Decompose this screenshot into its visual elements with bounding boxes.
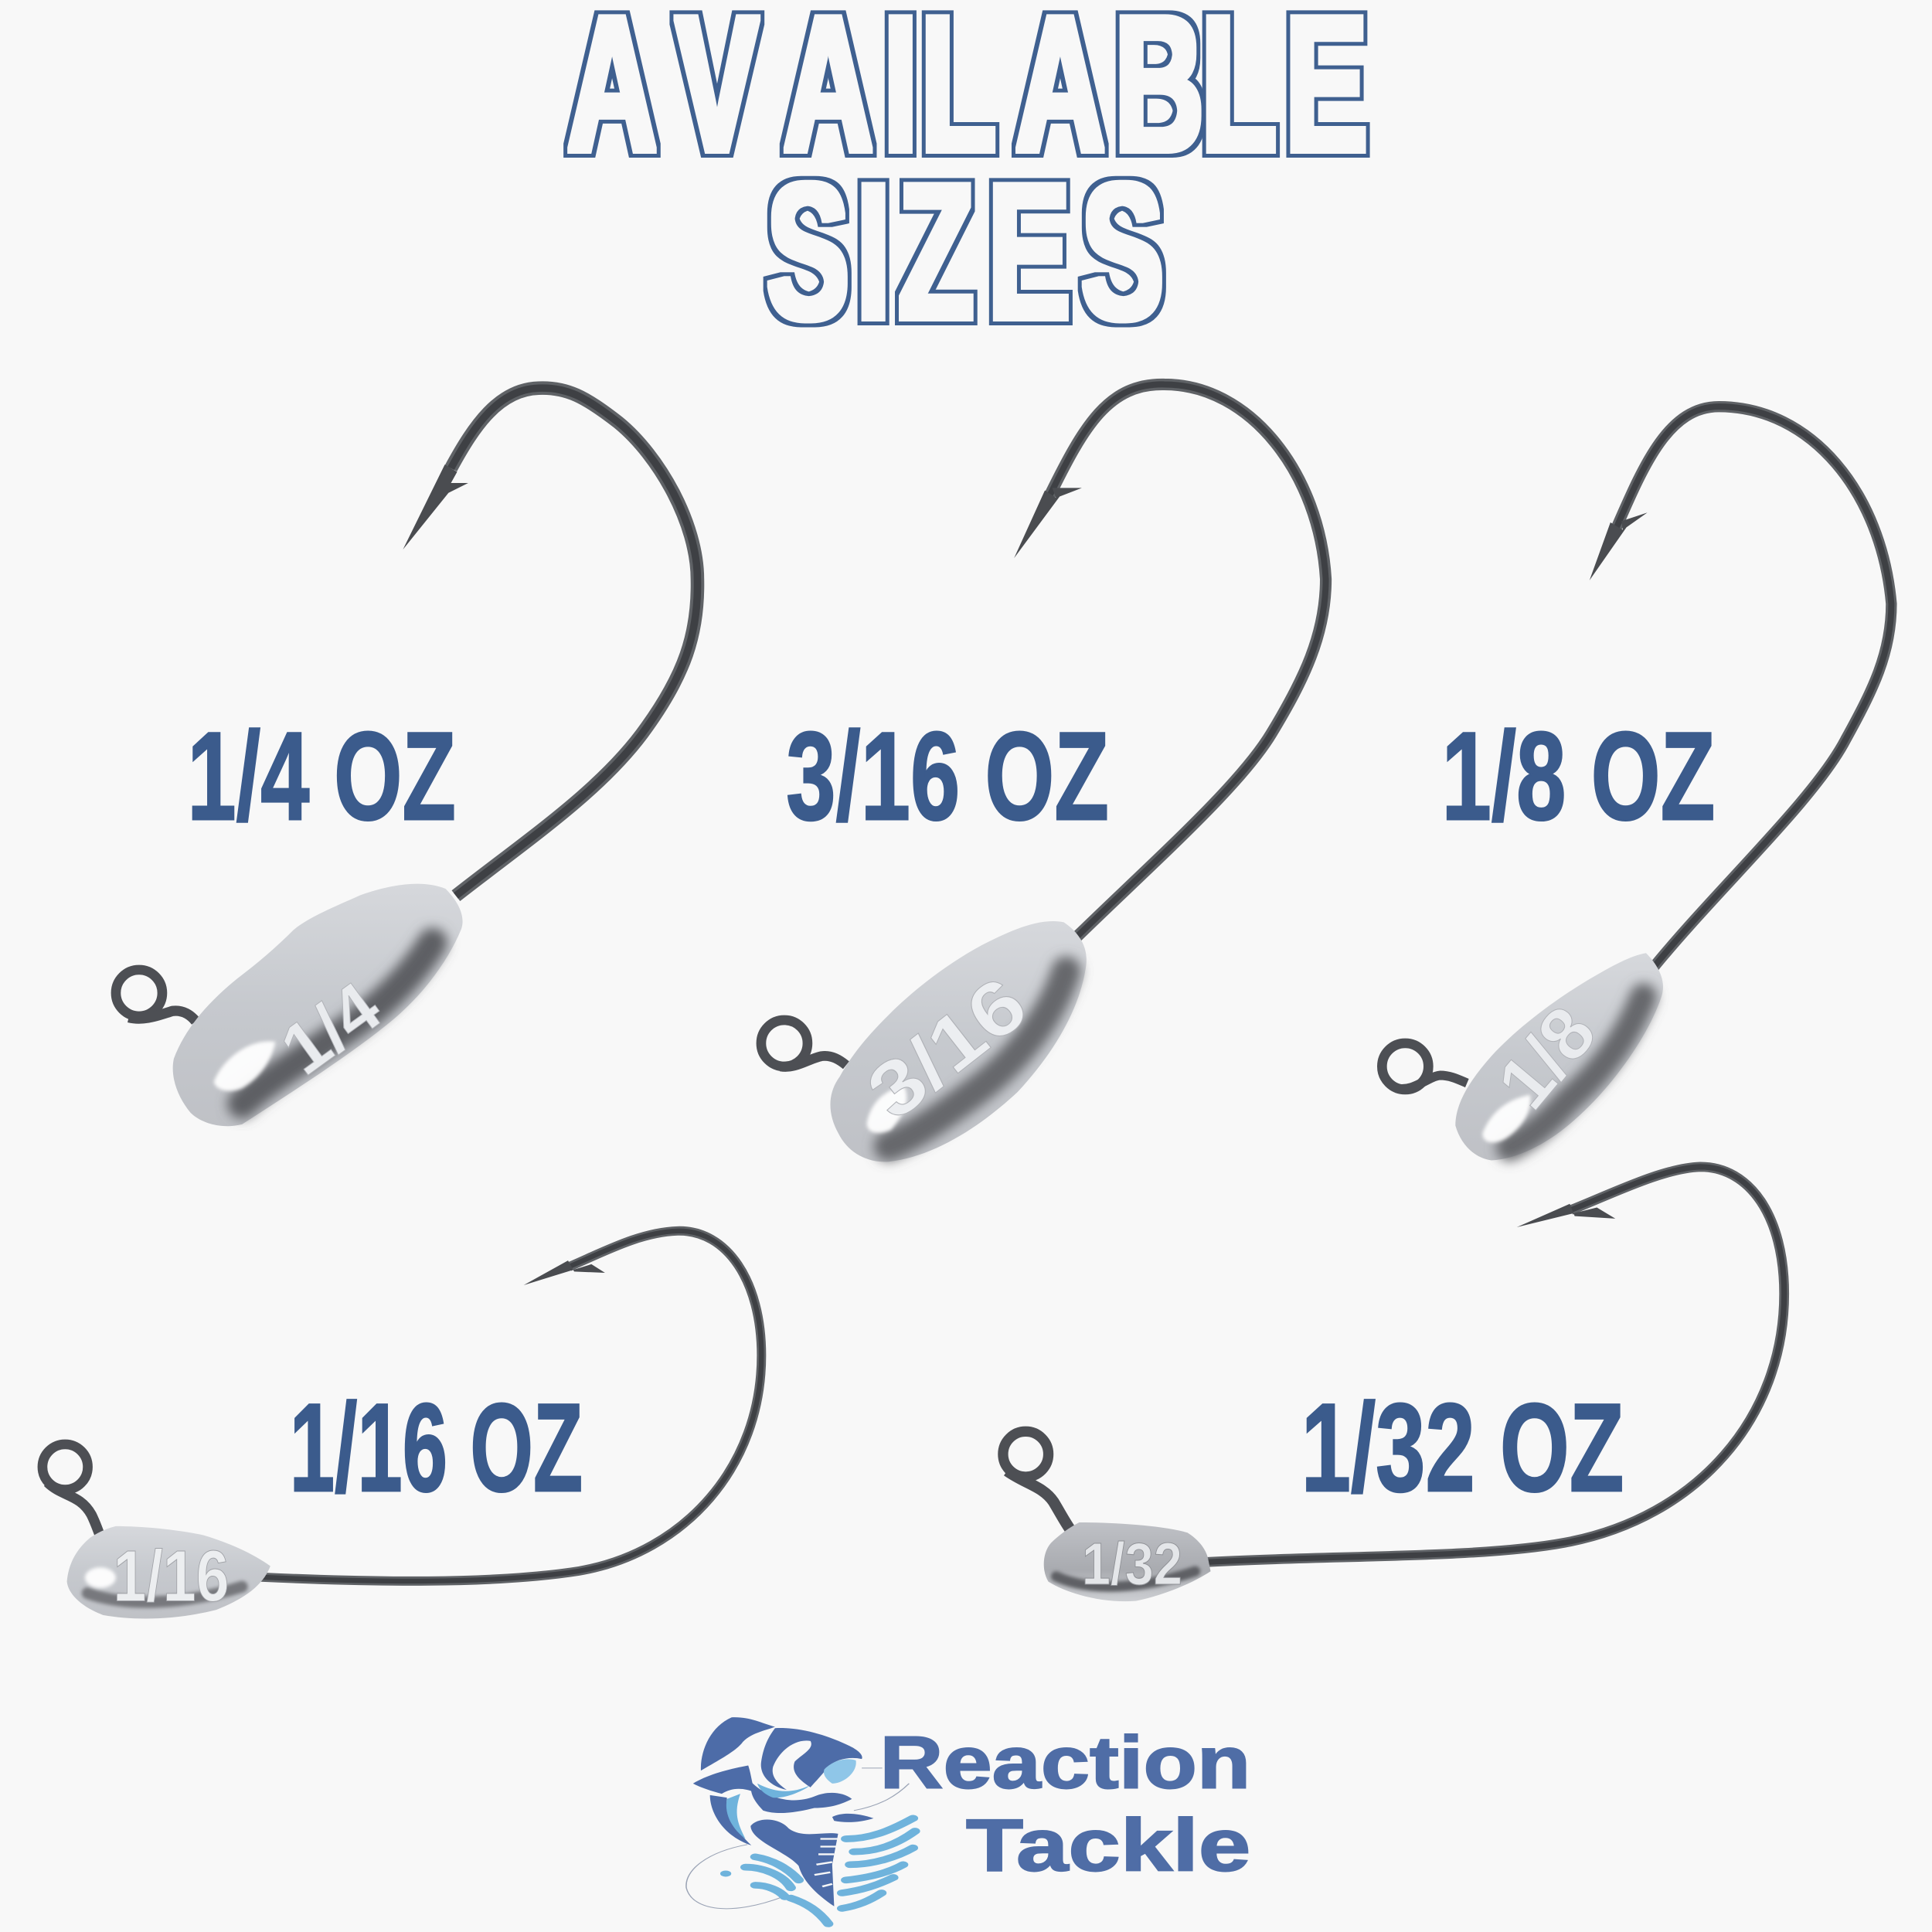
hook wire <box>1202 1167 1784 1563</box>
jig hook: 3/16 oz <box>761 384 1326 1162</box>
side dark <box>710 1795 751 1845</box>
logo: Reaction Tackle <box>686 1717 1250 1923</box>
lead body <box>1455 953 1663 1161</box>
dark band <box>889 971 1066 1146</box>
eye and lead head <box>761 921 1087 1162</box>
jig lure <box>832 1814 873 1822</box>
hook wire <box>1617 406 1891 974</box>
embossed size: 1/16 <box>114 1536 230 1617</box>
lower jaw <box>751 1782 852 1813</box>
eye and lead head <box>1003 1431 1211 1601</box>
hooks, labels and logo in reference display coordinates <box>43 384 1891 1923</box>
hook point and barb <box>403 464 468 549</box>
pectoral fin <box>693 1766 755 1794</box>
jig hook: 1/32 oz <box>1003 1167 1784 1601</box>
lead body <box>830 921 1087 1162</box>
bright highlight <box>214 1042 276 1091</box>
hook wire <box>451 388 698 896</box>
belly stripes <box>815 1838 838 1886</box>
line eye <box>116 970 196 1022</box>
splash left <box>746 1857 828 1923</box>
brand name line 2: Tackle <box>966 1804 1250 1886</box>
label: 1/32 oz: 1/32 OZ <box>1301 1378 1624 1518</box>
embossed size: 1/4 <box>267 966 395 1090</box>
lead body <box>67 1526 270 1618</box>
bright highlight <box>1482 1095 1530 1142</box>
hook point and barb <box>524 1260 605 1285</box>
eye and lead head <box>43 1444 270 1618</box>
dark band <box>1056 1571 1196 1587</box>
hook wire <box>1049 384 1326 946</box>
embossed size: 1/32 <box>1082 1532 1182 1597</box>
bright highlight <box>867 1086 906 1133</box>
label: 1/16 oz: 1/16 OZ <box>290 1378 583 1518</box>
label: 1/4 oz: 1/4 OZ <box>187 706 456 846</box>
side light blue <box>726 1794 746 1838</box>
dorsal fin <box>701 1717 775 1770</box>
fish body <box>750 1819 838 1906</box>
hook point and barb <box>1014 488 1082 558</box>
hook point and barb <box>1590 512 1648 580</box>
brand name line 1: Reaction <box>879 1721 1250 1804</box>
label: 3/16 oz: 3/16 OZ <box>786 706 1109 846</box>
jig hook: 1/16 oz <box>43 1231 761 1618</box>
jig hook: 1/8 oz <box>1382 406 1891 1161</box>
embossed size: 1/8 <box>1482 992 1612 1124</box>
dark band <box>87 1587 242 1602</box>
title line: SIZES: SIZES <box>767 142 1164 360</box>
eye and lead head <box>116 884 463 1126</box>
hook wire <box>261 1231 761 1581</box>
dark band <box>1509 997 1644 1148</box>
embossed size: 3/16 <box>852 961 1043 1136</box>
line eye <box>1382 1043 1467 1090</box>
title <box>567 0 1368 360</box>
fish head <box>761 1728 862 1790</box>
line eye <box>1003 1431 1072 1532</box>
lead body <box>173 884 463 1126</box>
logo icon: leaping bass <box>686 1717 915 1923</box>
jig hook: 1/4 oz <box>116 388 698 1126</box>
dark band <box>242 943 433 1104</box>
bright highlight <box>85 1567 116 1588</box>
label: 1/8 oz: 1/8 OZ <box>1441 706 1715 846</box>
hook point and barb <box>1517 1204 1615 1227</box>
lead body <box>1044 1522 1211 1601</box>
fishing line <box>686 1768 909 1909</box>
line eye <box>43 1444 100 1536</box>
jaw light blue <box>757 1784 809 1798</box>
eye and lead head <box>1382 953 1663 1161</box>
mouth <box>824 1759 856 1784</box>
water drop <box>720 1870 731 1876</box>
splash right <box>842 1818 915 1908</box>
line eye <box>761 1020 846 1066</box>
